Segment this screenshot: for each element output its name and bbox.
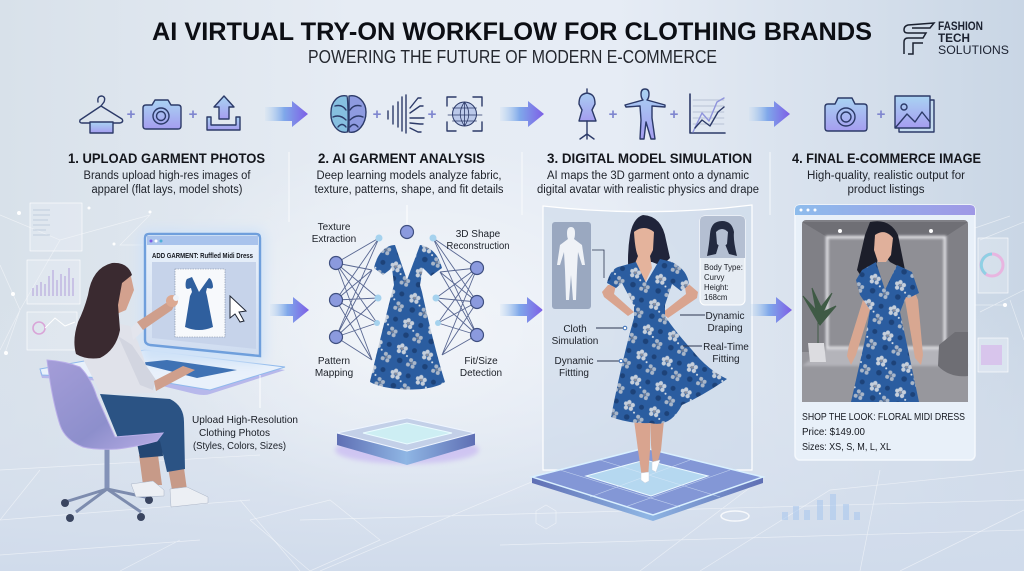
shop model (847, 221, 923, 402)
step 2 description (314, 170, 504, 196)
glass panel (543, 205, 752, 470)
profile text: Curvy (704, 273, 724, 282)
callouts: Simulation (552, 336, 598, 347)
step 3 description (537, 170, 759, 196)
card (795, 205, 975, 460)
icon: hanger (80, 96, 123, 133)
arrow: middle 1 (270, 297, 309, 323)
icon: avatar figure (625, 89, 665, 139)
panel: digital model simulation (532, 205, 763, 521)
platform (532, 448, 763, 521)
plus: + (877, 106, 886, 123)
profile text: Height: (704, 283, 729, 292)
plus: + (670, 106, 679, 123)
icon: picture (895, 96, 934, 132)
callouts: Dynamic (555, 356, 593, 367)
arms (118, 295, 195, 391)
person at desk (47, 263, 208, 522)
dress (370, 245, 445, 390)
head and hair (74, 263, 134, 358)
chair seat and back (47, 360, 163, 449)
icon: camera 2 (825, 98, 867, 131)
step 4 description: product listings (848, 184, 925, 196)
callout: upload note: (Styles, Colors, Sizes) (193, 440, 286, 452)
callouts: Fittting (559, 368, 589, 379)
callouts (552, 311, 749, 379)
logo: TECH (938, 33, 970, 45)
icon: globe scan (447, 97, 482, 131)
step 2 heading: 2. AI GARMENT ANALYSIS (318, 150, 485, 166)
step 3 description: digital avatar with realistic physics and drape (537, 184, 759, 196)
plus: + (609, 106, 618, 123)
subtitle: POWERING THE FUTURE OF MODERN E-COMMERCE (308, 47, 717, 67)
step 4 description: High-quality, realistic output for (807, 170, 965, 182)
callouts: Dynamic (706, 311, 744, 322)
avatar profile card (700, 216, 745, 305)
icon: line chart (690, 94, 725, 133)
arrow 1 (265, 101, 308, 127)
callouts: Fitting (712, 354, 740, 365)
plus: + (189, 106, 198, 123)
step 2 description: Deep learning models analyze fabric, (316, 170, 502, 182)
step 4 description (807, 170, 965, 196)
step 3 description: AI maps the 3D garment onto a dynamic (547, 170, 749, 182)
step 2 description: texture, patterns, shape, and fit details (314, 184, 504, 196)
plus: + (428, 106, 437, 123)
sofa (938, 332, 968, 376)
icon: brain (331, 96, 366, 132)
panel: garment analysis (312, 205, 510, 465)
step 1 description: Brands upload high-res images of (84, 170, 251, 182)
product text (802, 411, 965, 453)
hair (628, 215, 670, 287)
icon: camera (143, 100, 181, 129)
neural network (330, 205, 484, 360)
panel: desk and upload screen (40, 230, 285, 395)
callouts: Draping (707, 323, 743, 334)
node labels: Texture (318, 222, 351, 233)
step 3 heading: 3. DIGITAL MODEL SIMULATION (547, 150, 752, 166)
product photo (802, 220, 968, 402)
plant (803, 288, 836, 345)
step 1 description: apparel (flat lays, model shots) (92, 184, 243, 196)
title bar (795, 205, 975, 215)
title: AI VIRTUAL TRY-ON WORKFLOW FOR CLOTHING BRANDS (152, 18, 872, 46)
cursor (230, 296, 246, 322)
floor decorations (536, 494, 857, 529)
callouts: Real-Time (703, 342, 749, 353)
callout: upload note: Upload High-Resolution (192, 414, 298, 426)
dividers (289, 152, 770, 222)
step 4 heading: 4. FINAL E-COMMERCE IMAGE (792, 150, 981, 166)
product text: Price: $149.00 (802, 426, 865, 438)
node labels (312, 222, 510, 379)
logo: FASHION (938, 21, 983, 33)
body silhouette card (552, 222, 604, 309)
node labels: Fit/Size (464, 356, 498, 367)
plus: + (127, 106, 136, 123)
icon: circuit (388, 95, 424, 133)
screen heading: ADD GARMENT: Ruffled Midi Dress (152, 251, 253, 260)
desk (40, 350, 285, 395)
holographic panels, right (975, 216, 1024, 372)
node labels: Pattern (318, 356, 350, 367)
uploaded photo card (175, 269, 225, 337)
arrow 3 (749, 101, 790, 127)
torso (82, 322, 155, 394)
legs (100, 394, 208, 507)
icon: mannequin (579, 89, 596, 139)
node labels: Extraction (312, 234, 356, 245)
arrow: middle 3 (750, 297, 792, 323)
arrow 2 (500, 101, 544, 127)
callout: upload note: Clothing Photos (199, 427, 270, 439)
logo: SOLUTIONS (938, 45, 1009, 57)
keyboard (138, 360, 237, 378)
panel: final product listing (795, 205, 975, 460)
upload screen (140, 230, 265, 363)
arrow: middle 2 (500, 297, 543, 323)
node labels: Mapping (315, 368, 353, 379)
step 1 heading: 1. UPLOAD GARMENT PHOTOS (68, 150, 265, 166)
product text: Sizes: XS, S, M, L, XL (802, 441, 891, 453)
avatar model (552, 215, 749, 483)
legs (634, 420, 664, 483)
icon: upload (207, 96, 240, 130)
logo (904, 21, 1009, 57)
callout: upload note (192, 375, 298, 452)
platform (335, 418, 479, 465)
node labels: Detection (460, 368, 502, 379)
dress (607, 259, 727, 424)
node labels: 3D Shape (456, 229, 501, 240)
product text: SHOP THE LOOK: FLORAL MIDI DRESS (802, 411, 965, 423)
profile text: Body Type: (704, 263, 743, 272)
face and neck (634, 228, 654, 283)
step 1 description (84, 170, 251, 196)
plus: + (373, 106, 382, 123)
node labels: Reconstruction (446, 241, 510, 252)
holographic panels, left (27, 203, 82, 350)
chair (61, 447, 153, 522)
callouts: Cloth (563, 324, 587, 335)
arms (602, 280, 698, 318)
profile text: 168cm (704, 293, 727, 302)
